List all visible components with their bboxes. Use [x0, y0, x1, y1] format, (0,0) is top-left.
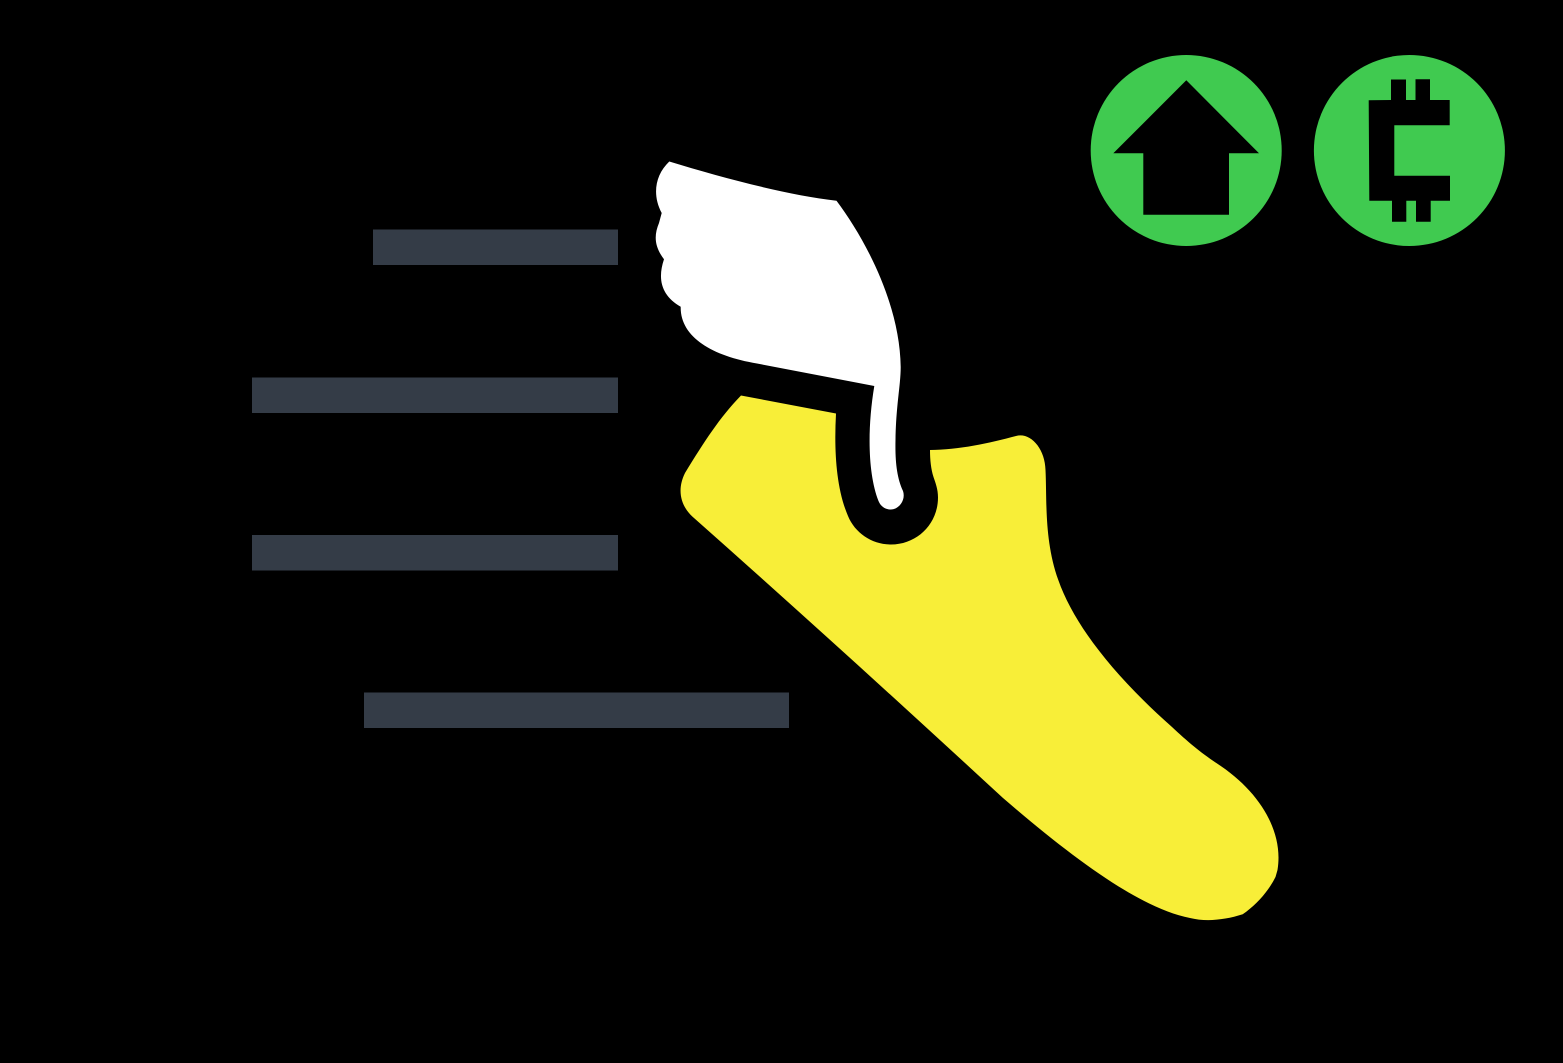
icon: green bitcoin badge [1314, 55, 1505, 246]
icon: green up arrow badge [1091, 55, 1282, 246]
shoe body [681, 396, 1278, 920]
speed lines [252, 230, 789, 728]
wing [656, 162, 904, 510]
